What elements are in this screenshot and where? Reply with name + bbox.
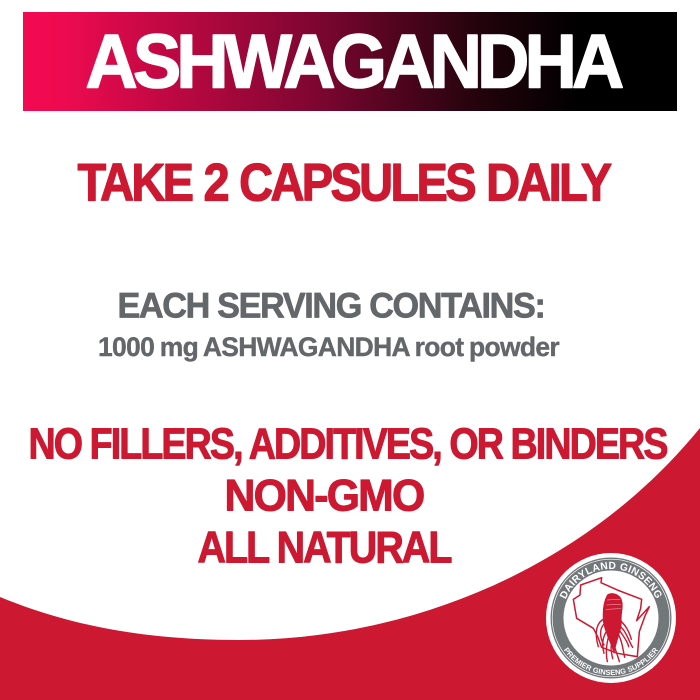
icon: ginseng root <box>596 594 633 662</box>
claim: non-GMO: NON-GMO <box>224 472 424 521</box>
logo: Dairyland Ginseng badge <box>546 553 676 683</box>
title banner <box>23 12 677 111</box>
logo inner white disc <box>564 570 658 666</box>
logo bottom text: PREMIER GINSENG SUPPLIER <box>564 647 658 675</box>
root strands <box>596 618 633 662</box>
banner title: ASHWAGANDHA <box>86 19 623 104</box>
icon: Wisconsin state outline <box>573 578 649 657</box>
logo grey ring <box>550 558 672 678</box>
claim: all natural: ALL NATURAL <box>198 524 451 573</box>
product claims <box>28 421 668 573</box>
dosage heading: TAKE 2 CAPSULES DAILY <box>78 154 612 212</box>
banner gradient bar <box>23 12 677 111</box>
background curve: red swoosh <box>0 428 700 700</box>
logo white outer disc <box>546 553 676 683</box>
logo thin white line <box>552 559 670 677</box>
root head bands <box>606 599 621 609</box>
serving heading: EACH SERVING CONTAINS: <box>118 286 544 326</box>
serving detail: 1000 mg ASHWAGANDHA root powder <box>98 332 560 362</box>
root body <box>603 594 622 653</box>
serving information <box>98 286 560 362</box>
logo top text: DAIRYLAND GINSENG <box>560 562 662 599</box>
